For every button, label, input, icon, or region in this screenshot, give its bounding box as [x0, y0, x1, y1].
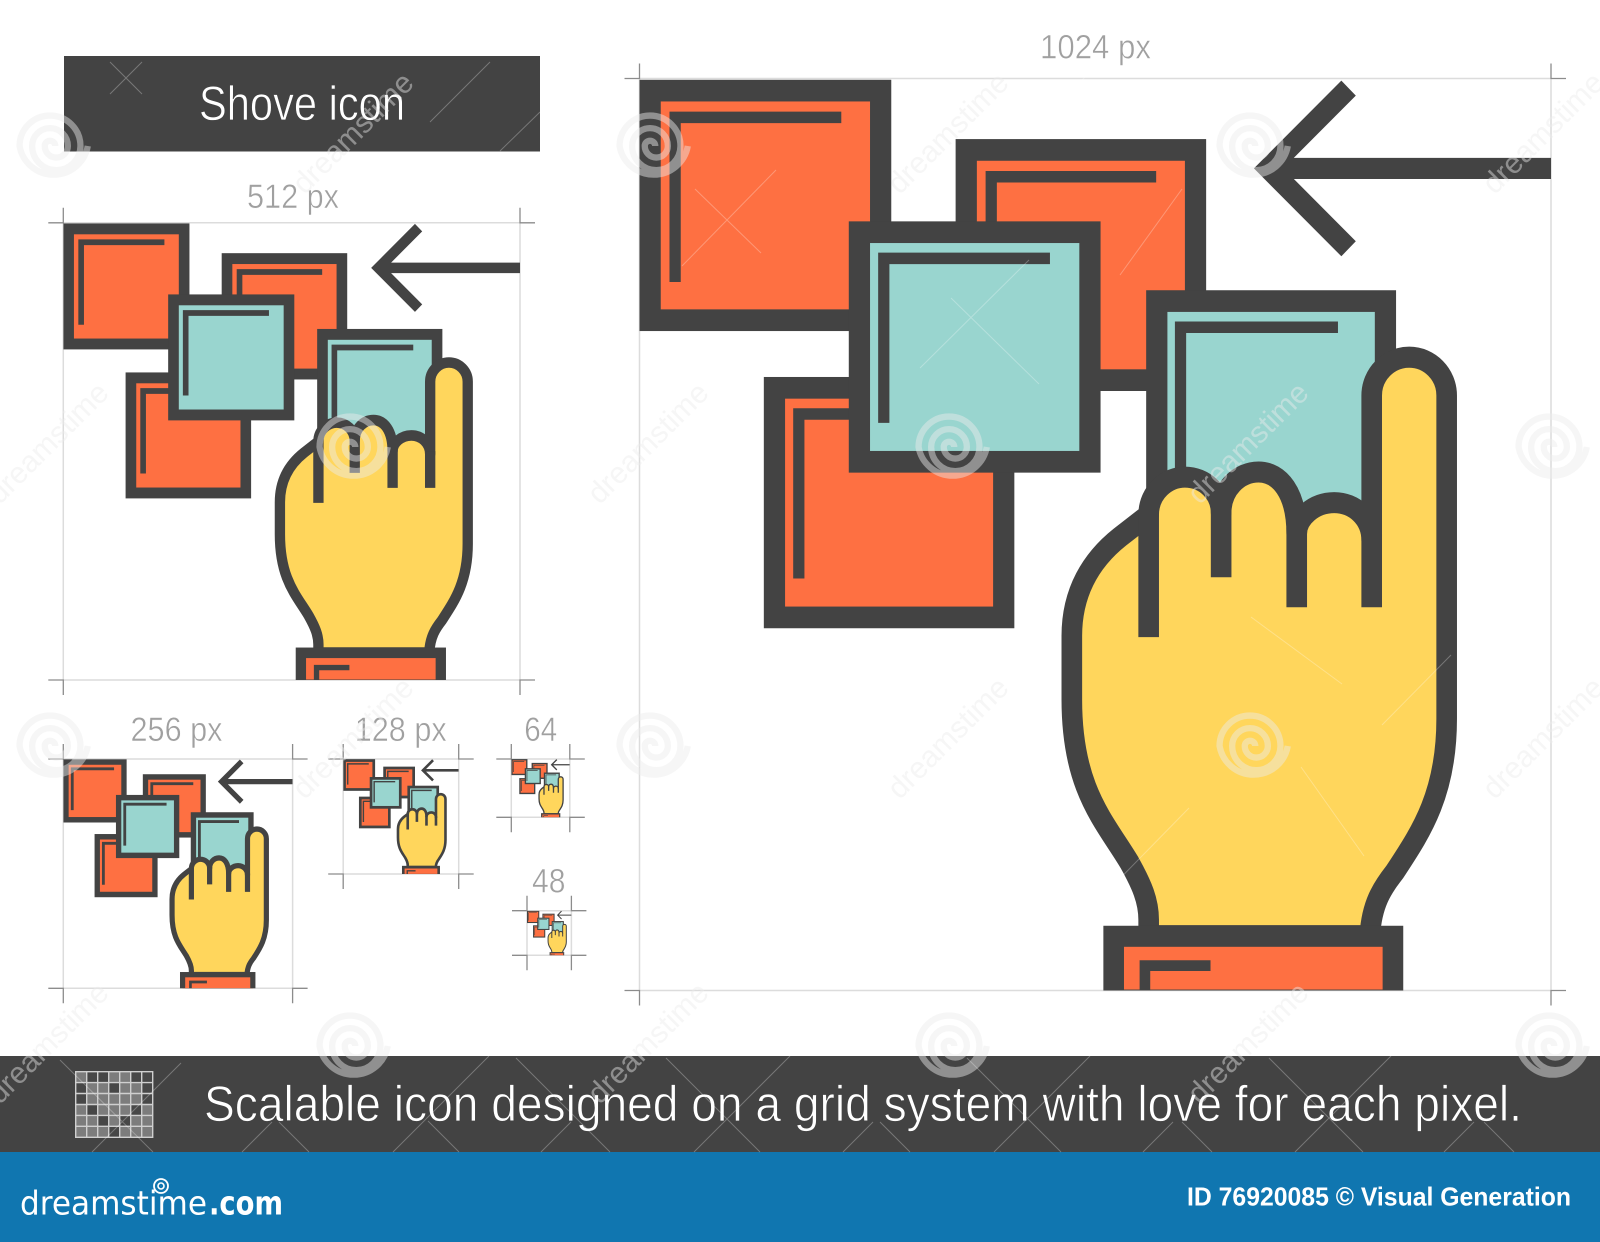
watermark: dreamstime text: dreamstime [286, 671, 420, 805]
image id credit: ID 76920085 © Visual Generation [1187, 1182, 1571, 1212]
label: 64: 64 [524, 711, 557, 749]
label: 256 px: 256 px [130, 711, 222, 749]
icon preview: 128 px [328, 744, 474, 889]
watermark: dreamstime text: dreamstime [286, 66, 420, 200]
logo: .com [209, 1184, 283, 1222]
watermark: dreamstime text: dreamstime [1181, 976, 1315, 1110]
watermark: dreamstime text: dreamstime [581, 376, 715, 510]
watermark: dreamstime text: dreamstime [581, 976, 715, 1110]
icon: pixel grid [76, 1072, 153, 1137]
watermark: spirals [20, 116, 1587, 1075]
watermark: dreamstime text: dreamstime [881, 66, 1015, 200]
title banner [64, 56, 540, 152]
caption bar: Scalable icon designed on a grid system with love for each pixel. [204, 1076, 1522, 1132]
icon preview: 1024 px [624, 64, 1566, 1006]
icon preview: 64 px [496, 744, 585, 832]
label: 48: 48 [532, 863, 566, 901]
caption bar [0, 1056, 1600, 1152]
icon preview: 48 px [512, 896, 586, 970]
label: 128 px: 128 px [355, 711, 447, 749]
icon preview: 256 px [48, 744, 308, 1003]
footer bar [0, 1152, 1600, 1242]
icon preview: 512 px [48, 208, 535, 695]
title banner: Shove icon [199, 78, 405, 131]
logo: dreamstime [20, 1184, 207, 1222]
watermark: dreamstime text: dreamstime [1181, 376, 1315, 510]
logo [20, 1179, 283, 1222]
label: 512 px: 512 px [247, 178, 339, 216]
label: 1024 px: 1024 px [1040, 28, 1151, 66]
watermark: dreamstime text: dreamstime [881, 671, 1015, 805]
